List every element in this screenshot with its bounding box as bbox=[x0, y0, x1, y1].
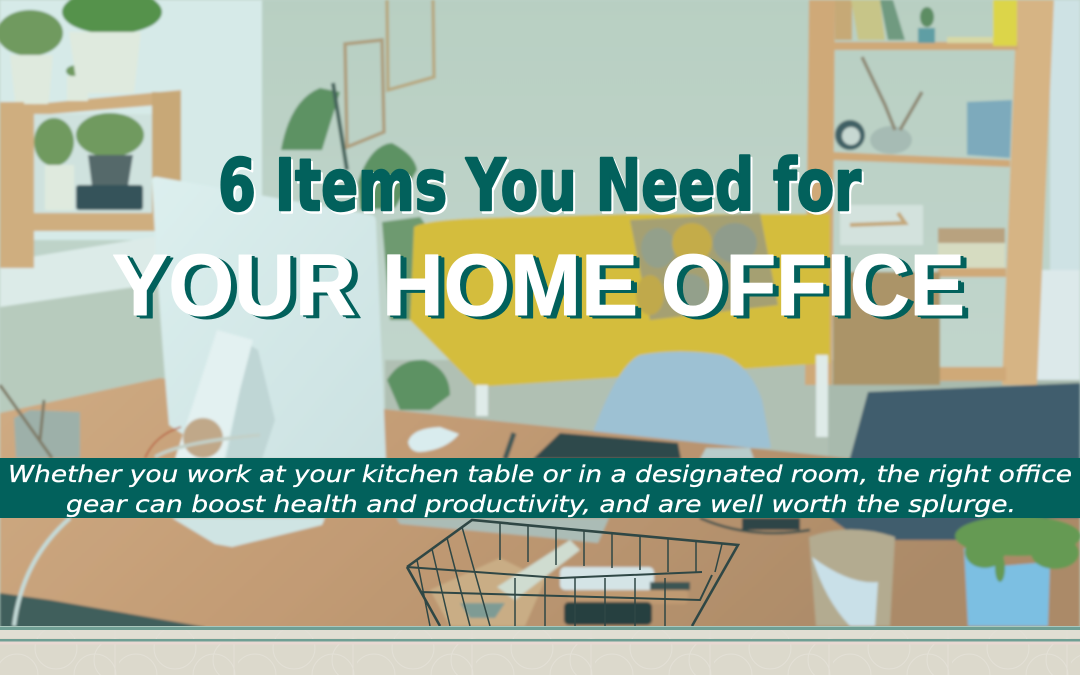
title line 2: extruded shadow mid: OFFICE bbox=[664, 238, 968, 336]
glass bbox=[809, 530, 895, 626]
monstera plant bbox=[281, 88, 450, 410]
wicker basket bbox=[833, 272, 940, 385]
title line 2: extruded shadow mid: HOME bbox=[385, 238, 641, 336]
floor behind desk bbox=[385, 360, 865, 465]
title line 2: extruded shadow: YOUR bbox=[118, 240, 362, 337]
monitor stand shadow bbox=[226, 342, 275, 459]
left shelf plants bbox=[0, 0, 162, 166]
monitor stand bbox=[175, 330, 253, 459]
mouse bbox=[408, 427, 459, 452]
footer band bbox=[0, 626, 1080, 675]
left shelf bbox=[0, 90, 181, 268]
desk plant bbox=[964, 548, 1050, 626]
title line 2: extruded shadow: HOME bbox=[388, 240, 644, 337]
monitor base bbox=[172, 518, 325, 547]
banner bbox=[0, 458, 1080, 518]
title line 1: 6 Items You Need for bbox=[218, 144, 861, 227]
shelf items bbox=[835, 0, 1017, 268]
pencil holder bbox=[0, 385, 80, 458]
sofa bbox=[410, 214, 830, 387]
phone bbox=[700, 448, 754, 459]
title line 2: extruded shadow bbox=[118, 240, 971, 337]
title line 2: extruded shadow: OFFICE bbox=[667, 240, 971, 337]
pen bbox=[505, 433, 514, 459]
monitor bbox=[152, 177, 386, 459]
lower left wall bbox=[0, 262, 170, 417]
stand cable hole bbox=[183, 418, 223, 458]
tablet bbox=[533, 433, 681, 459]
banner line 2: gear can boost health and productivity, and are well worth the splurge. bbox=[66, 492, 1016, 518]
banner line 1: Whether you work at your kitchen table or in a designated room, the right office bbox=[8, 462, 1072, 488]
title bbox=[112, 144, 971, 337]
title line 2: extruded shadow mid bbox=[115, 238, 968, 336]
title line 1: white shadow: 6 Items You Need for bbox=[220, 146, 863, 230]
left wall bbox=[0, 0, 262, 240]
title line 2: HOME bbox=[382, 237, 638, 334]
white sill bbox=[0, 237, 262, 307]
keyboard bbox=[396, 518, 609, 543]
cables bbox=[14, 427, 260, 626]
sofa cushion bbox=[630, 213, 778, 320]
title line 2: OFFICE bbox=[661, 237, 965, 334]
wire basket bbox=[407, 520, 738, 626]
right wall bbox=[1050, 0, 1080, 385]
banner text bbox=[8, 462, 1072, 518]
wall frames bbox=[345, 0, 434, 147]
title line 2: extruded shadow mid: YOUR bbox=[115, 238, 359, 336]
basket items bbox=[430, 540, 690, 626]
title line 2 bbox=[112, 237, 965, 334]
title line 2: YOUR bbox=[112, 237, 356, 334]
table bbox=[0, 378, 1080, 630]
laptop bbox=[830, 383, 1080, 540]
chair bbox=[593, 352, 771, 448]
phone and cord bbox=[700, 518, 810, 533]
right shelf bbox=[805, 0, 1054, 385]
